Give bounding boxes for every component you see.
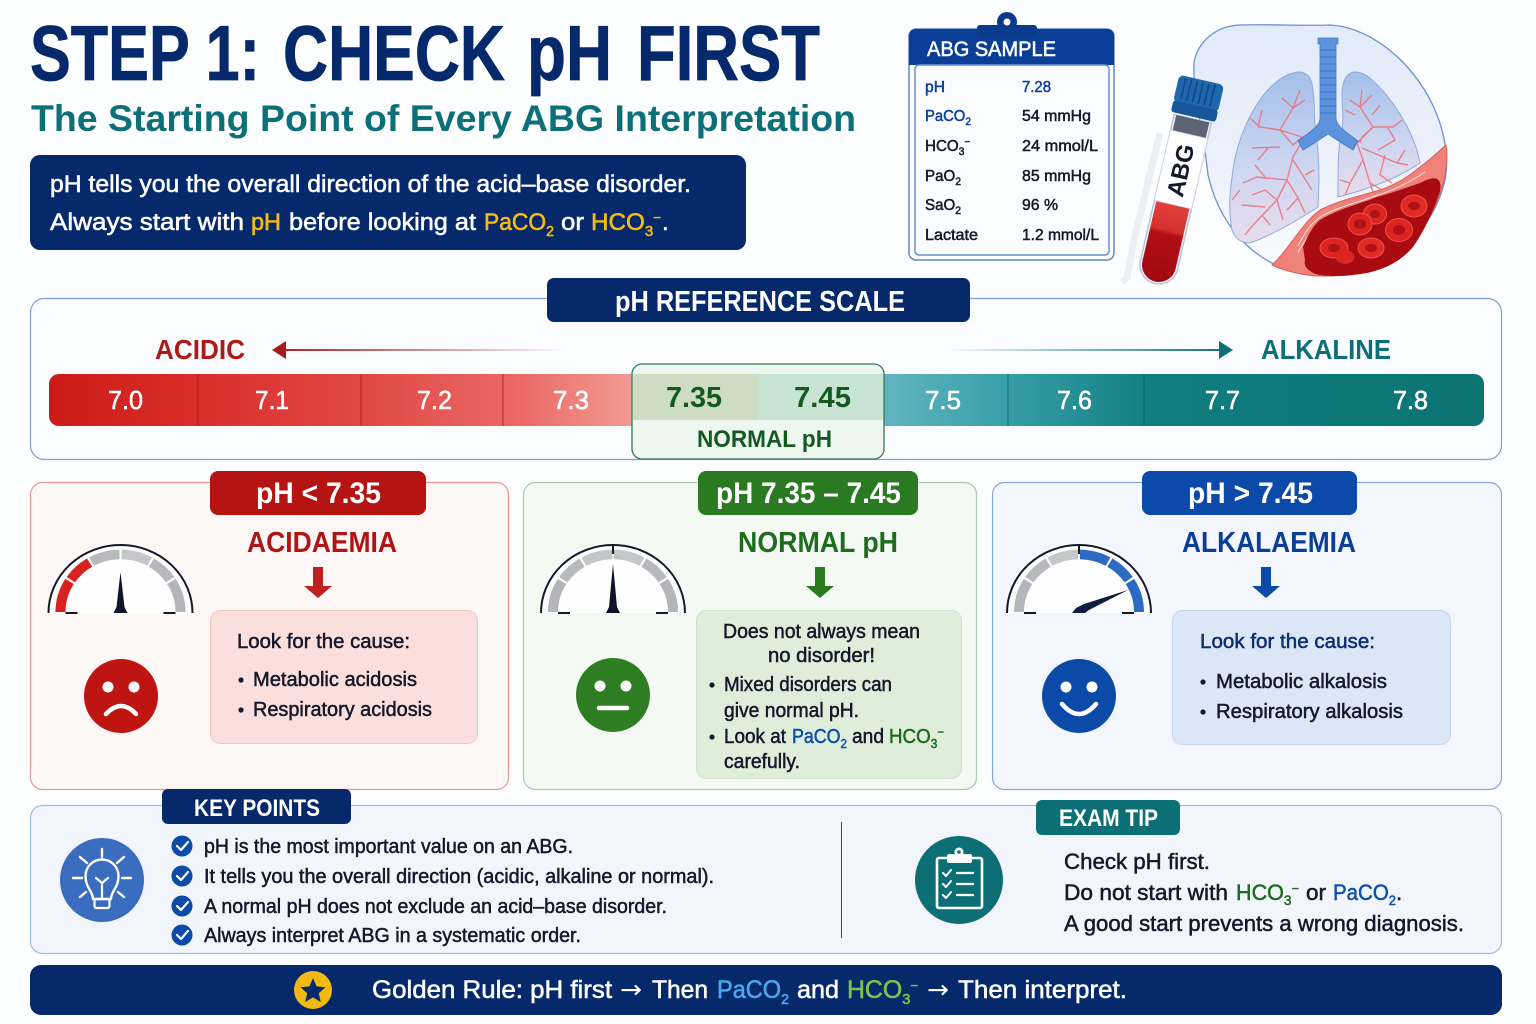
causes box: alkalaemia: Metabolic alkalosis [1216,671,1387,693]
icon: clipboard checklist [915,836,1003,924]
arrow down [304,567,332,598]
intro banner: − [653,210,661,225]
alkalaemia tag [1142,471,1357,515]
ABG sample clipboard: HCO [925,138,961,155]
causes box: acidaemia: Metabolic acidosis [253,669,417,691]
happy face [1042,659,1116,733]
acidic scale bar: 7.2 [417,385,452,415]
normal pH window: 7.45 [794,382,851,414]
acidic scale bar [49,374,640,426]
causes box: alkalaemia [1172,610,1450,744]
alkaline scale bar: 7.7 [1205,385,1240,415]
intro banner: pH [251,209,281,236]
normal pH window [632,364,884,459]
ABG sample clipboard [909,12,1114,260]
acidic scale bar: 7.1 [255,385,289,415]
acidic direction label and arrow: ACIDIC [155,334,245,365]
golden rule footer: Golden Rule: pH first [372,976,612,1004]
golden rule footer: HCO [847,976,903,1004]
intro banner: pH tells you the overall direction of the acid–base disorder. [50,171,691,198]
normal heading: NORMAL pH [738,527,898,559]
exam tip text: Do not start with [1064,880,1228,905]
note box: normal pH [696,610,962,778]
acidaemia heading: ACIDAEMIA [247,527,397,559]
exam tip text: − [1292,881,1299,896]
intro banner: . [662,209,669,236]
title: CHECK [283,9,505,97]
alkaline scale bar: 7.8 [1393,385,1428,415]
exam tip text: or [1306,880,1326,905]
exam tip text: Check pH first. [1064,849,1210,874]
scale heading: pH REFERENCE SCALE [615,286,905,318]
exam tip text [1064,849,1464,936]
golden rule footer: 2 [781,991,789,1008]
alkaline scale bar: 7.6 [1057,385,1092,415]
causes box: acidaemia: Look for the cause: [237,631,410,653]
golden rule footer: PaCO [717,976,785,1004]
ABG sample clipboard: 2 [955,176,961,188]
panel: key points and exam tip [30,789,1502,954]
subtitle: The Starting Point of Every ABG Interpretation [31,98,856,139]
arrow down [1252,567,1280,598]
note box: normal pH: PaCO [792,726,846,748]
note box: normal pH: 2 [841,736,847,751]
intro banner: PaCO [484,209,549,236]
note box: normal pH: 3 [931,736,937,751]
alkalaemia tag: pH > 7.45 [1188,477,1313,510]
note box: normal pH: Mixed disorders can [724,674,892,696]
ABG sample clipboard: pH [925,79,945,96]
ABG sample clipboard: − [964,137,970,148]
alkaline direction label and arrow: ALKALINE [1261,334,1391,365]
ABG sample clipboard: 2 [955,205,961,217]
exam tip text: HCO [1236,880,1285,905]
title: STEP 1: [30,9,260,97]
panel: alkalaemia [992,471,1502,790]
ABG sample clipboard: ABG SAMPLE [927,38,1056,61]
note box: normal pH: Look at [724,726,786,748]
golden rule footer: → [620,975,642,1004]
alkaline direction label and arrow [945,334,1391,365]
illustration: ABG blood tube [1122,75,1224,289]
title: FIRST [637,9,820,97]
intro banner: 2 [546,223,554,240]
key point list [172,836,714,947]
acidaemia tag [210,471,426,515]
golden rule footer [30,965,1502,1015]
ABG sample clipboard: 1.2 mmol/L [1022,227,1099,244]
gauge: low pH [48,545,192,613]
ABG sample clipboard: 54 mmHg [1022,108,1091,125]
normal pH window: 7.35 [666,382,722,414]
golden rule footer: 3 [902,991,910,1008]
exam tip text: PaCO [1333,880,1393,905]
normal tag: pH 7.35 – 7.45 [716,477,901,510]
acidaemia tag: pH < 7.35 [256,477,381,510]
note box: normal pH: give normal pH. [724,700,859,722]
icon: light bulb [60,838,144,922]
scale heading [547,278,970,322]
alkaline scale bar [880,374,1484,426]
illustration: lungs and blood vessel [1194,25,1447,276]
note box: normal pH: − [937,725,944,739]
note box: normal pH: HCO [889,726,933,748]
ABG sample clipboard: PaO [925,168,957,185]
exam tip text: A good start prevents a wrong diagnosis. [1064,911,1464,936]
ABG sample clipboard: 7.28 [1022,79,1051,96]
exam tip text: 3 [1284,892,1292,908]
gauge: normal pH [541,544,685,613]
key point list: pH is the most important value on an ABG. [204,836,573,858]
exam tip text: . [1396,880,1402,905]
ABG sample clipboard: 85 mmHg [1022,168,1091,185]
key point list: Always interpret ABG in a systematic order. [204,925,581,947]
ABG sample clipboard: 24 mmol/L [1022,138,1098,155]
title [30,9,820,97]
causes box: alkalaemia: Look for the cause: [1200,631,1375,653]
panel: normal pH [524,471,976,790]
golden rule footer: → [927,975,949,1004]
illustration: ABG blood tube: ABG [1162,142,1200,200]
arrow down [806,567,834,598]
key point list: It tells you the overall direction (acidic, alkaline or normal). [204,866,714,888]
gauge: high pH [1007,544,1151,613]
ABG sample clipboard: 2 [965,116,971,128]
panel: acidaemia [30,471,508,790]
note box: normal pH: no disorder! [768,645,875,667]
normal pH window: NORMAL pH [697,426,832,453]
causes box: alkalaemia: Respiratory alkalosis [1216,701,1403,723]
causes box: acidaemia [210,610,478,744]
acidic scale bar: 7.3 [553,385,589,415]
intro banner [30,155,746,250]
exam tip tag [1036,800,1180,835]
golden rule footer: − [910,978,918,993]
neutral face [576,658,650,732]
intro banner: before looking at [289,209,476,236]
exam tip tag: EXAM TIP [1059,805,1158,832]
key points tag [162,789,351,824]
golden rule footer: Then interpret. [958,976,1127,1004]
golden rule footer: Then [652,976,708,1004]
causes box: acidaemia: Respiratory acidosis [253,699,432,721]
alkaline scale bar: 7.5 [925,385,961,415]
title: pH [527,9,612,97]
note box: normal pH: and [852,726,884,748]
note box: normal pH: carefully. [724,751,800,773]
sad face [84,659,158,733]
ABG sample clipboard: Lactate [925,227,978,244]
ABG sample clipboard: 96 % [1022,197,1058,214]
icon: star badge [294,971,332,1009]
ABG sample clipboard: PaCO [925,108,969,125]
ABG sample clipboard: SaO [925,197,957,214]
note box: normal pH: Does not always mean [723,621,920,643]
panel: pH reference scale [30,278,1502,460]
key point list: A normal pH does not exclude an acid–base disorder. [204,896,667,918]
normal tag [698,471,918,515]
acidic direction label and arrow [155,334,565,365]
alkalaemia heading: ALKALAEMIA [1182,527,1356,559]
key points tag: KEY POINTS [194,795,320,822]
intro banner: Always start with [50,209,244,236]
golden rule footer: and [797,976,839,1004]
intro banner: or [561,209,584,236]
ABG sample clipboard: 3 [959,146,964,158]
exam tip text: 2 [1389,892,1396,908]
intro banner: 3 [645,223,653,240]
intro banner: HCO [591,209,644,236]
acidic scale bar: 7.0 [108,385,143,415]
